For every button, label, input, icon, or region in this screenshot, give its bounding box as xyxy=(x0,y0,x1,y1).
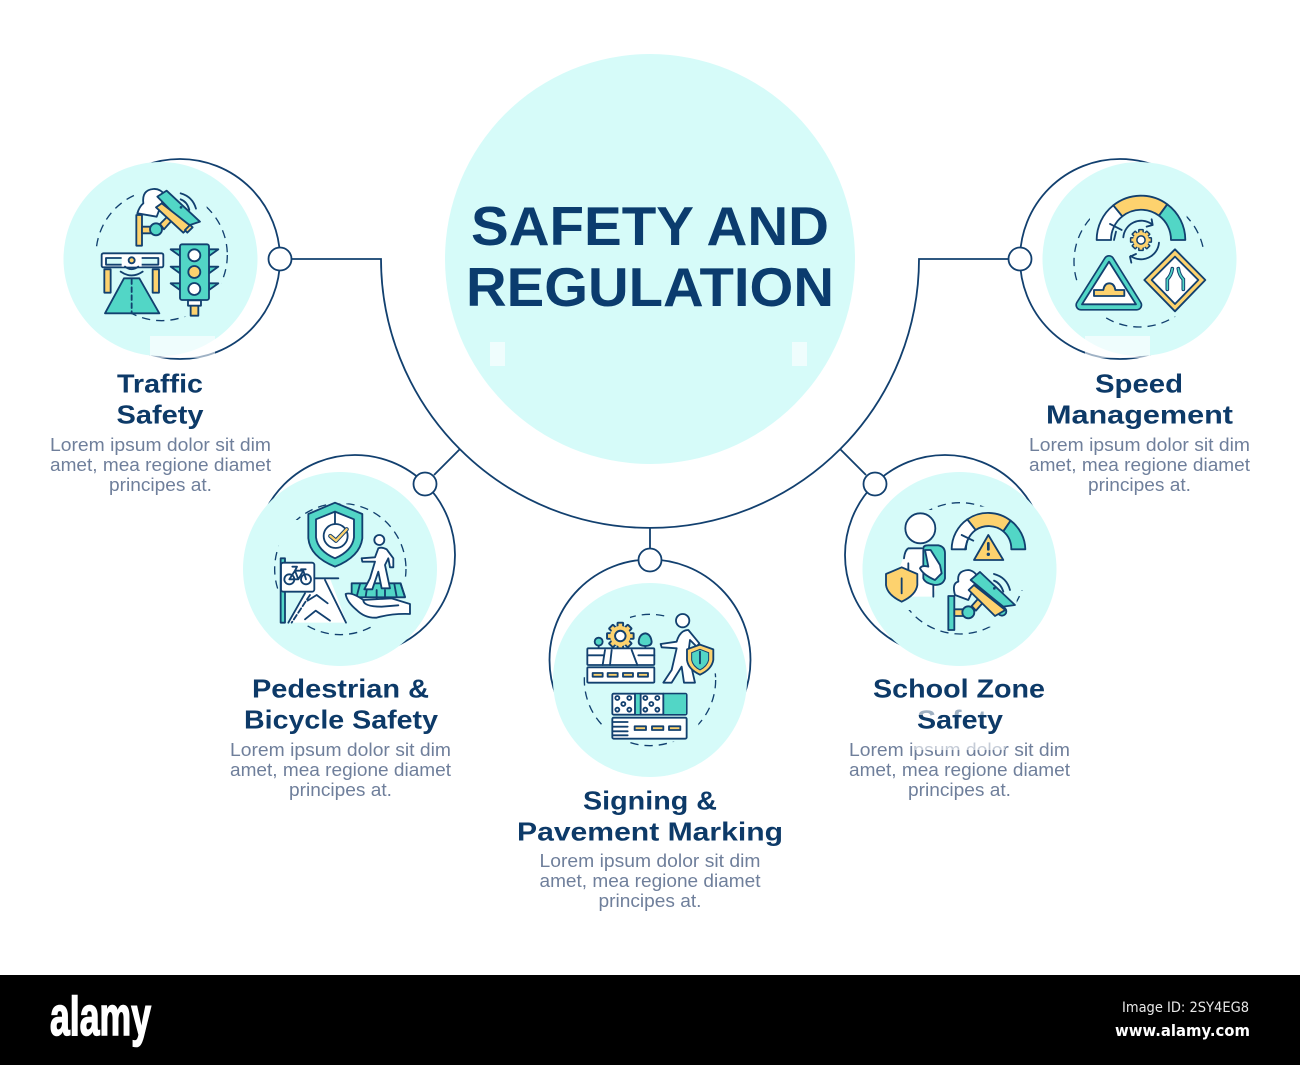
heading: pedestrian and bicycle safety xyxy=(244,674,439,734)
text: school zone description: amet, mea regione diamet xyxy=(849,760,1070,780)
text: school zone description: principes at. xyxy=(908,780,1011,800)
heading: traffic safety: Traffic xyxy=(117,368,203,398)
panel: pedestrian and bicycle safety xyxy=(230,455,455,800)
text: pedestrian and bicycle description xyxy=(230,740,451,800)
text: traffic safety description xyxy=(50,435,271,495)
text: school zone description xyxy=(849,740,1070,800)
ring: pedestrian and bicycle safety xyxy=(255,455,455,655)
heading: traffic safety: Safety xyxy=(116,400,204,430)
node: traffic safety xyxy=(268,248,292,270)
text: pedestrian and bicycle description: amet, mea regione diamet xyxy=(230,760,451,780)
text: pedestrian and bicycle description: principes at. xyxy=(289,780,392,800)
node: pedestrian and bicycle safety xyxy=(414,472,436,496)
heading: school zone safety xyxy=(873,674,1045,734)
heading: signing and pavement marking: Signing & xyxy=(583,786,717,816)
text: signing and pavement description: amet, mea regione diamet xyxy=(540,871,760,891)
node: school zone safety xyxy=(864,472,886,496)
icon: speedometer and road signs xyxy=(1073,190,1207,327)
footer logo: alamy xyxy=(50,985,151,1047)
panel: traffic safety xyxy=(50,159,292,495)
disc: signing and pavement marking xyxy=(553,583,747,777)
disc: speed management xyxy=(1042,162,1236,356)
ring: traffic safety xyxy=(80,159,280,359)
title: REGULATION xyxy=(466,256,834,318)
icon: traffic camera, gantry and signal xyxy=(93,182,227,321)
panel: speed management xyxy=(1008,159,1250,495)
heading: pedestrian and bicycle safety: Bicycle Safety xyxy=(244,704,439,734)
heading: traffic safety xyxy=(116,368,204,430)
title: SAFETY AND xyxy=(471,195,829,257)
heading: speed management xyxy=(1046,368,1233,430)
connector: main arc and branches xyxy=(292,259,1031,548)
text: traffic safety description: amet, mea regione diamet xyxy=(50,455,271,475)
heading: school zone safety: Safety xyxy=(917,704,1004,734)
panel: school zone safety xyxy=(845,455,1070,800)
node: signing and pavement marking xyxy=(638,548,662,572)
disc: school zone safety xyxy=(862,472,1056,666)
heading: speed management: Management xyxy=(1046,400,1233,430)
footer url: www.alamy.com xyxy=(1115,1021,1250,1040)
heading: signing and pavement marking: Pavement Marking xyxy=(517,816,783,846)
text: signing and pavement description: principes at. xyxy=(598,891,702,911)
node: speed management xyxy=(1008,248,1032,270)
watermark remnants xyxy=(150,336,1150,750)
heading: pedestrian and bicycle safety: Pedestrian & xyxy=(252,674,429,704)
title xyxy=(466,195,834,318)
text: pedestrian and bicycle description: Lorem ipsum dolor sit dim xyxy=(230,740,451,760)
icon: student, speed warning, camera xyxy=(883,493,1030,634)
heading: school zone safety: School Zone xyxy=(873,674,1045,704)
text: traffic safety description: principes at. xyxy=(109,475,212,495)
footer image id: Image ID: 2SY4EG8 xyxy=(1122,1000,1249,1016)
ring: signing and pavement marking xyxy=(550,560,750,760)
text: speed management description: Lorem ipsum dolor sit dim xyxy=(1029,435,1250,455)
text: speed management description: principes at. xyxy=(1088,475,1191,495)
text: signing and pavement description xyxy=(540,851,760,911)
text: speed management description xyxy=(1029,435,1250,495)
heading: speed management: Speed xyxy=(1095,368,1183,398)
ring: school zone safety xyxy=(845,455,1045,655)
heading: signing and pavement marking xyxy=(517,786,783,846)
icon: signage, pedestrian with shield, pavement marks xyxy=(582,613,717,746)
text: speed management description: amet, mea regione diamet xyxy=(1029,455,1250,475)
disc: traffic safety xyxy=(64,162,258,356)
panel: signing and pavement marking xyxy=(517,548,783,911)
ring: speed management xyxy=(1020,159,1220,359)
central circle xyxy=(445,54,855,464)
footer bar xyxy=(0,975,1300,1065)
disc: pedestrian and bicycle safety xyxy=(243,472,437,666)
text: school zone description: Lorem ipsum dolor sit dim xyxy=(849,740,1070,760)
text: signing and pavement description: Lorem ipsum dolor sit dim xyxy=(540,851,760,871)
text: traffic safety description: Lorem ipsum dolor sit dim xyxy=(50,435,271,455)
icon: shield, pedestrian, bicycle sign xyxy=(275,493,412,635)
